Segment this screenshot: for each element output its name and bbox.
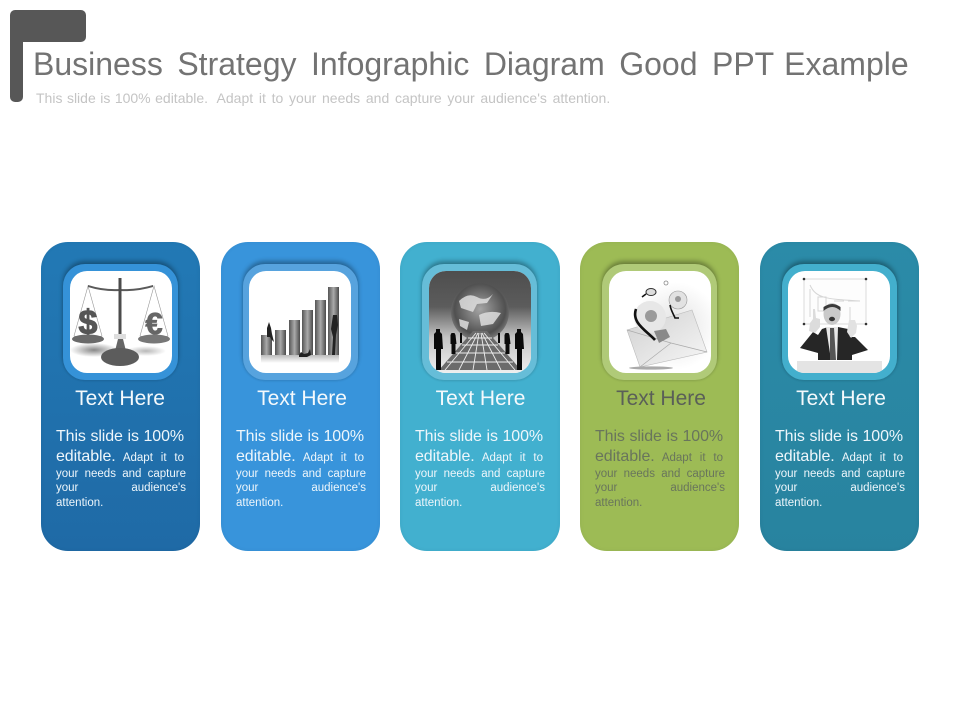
panel: card 1: your needs and capture bbox=[56, 468, 186, 480]
image frame: scales bbox=[63, 264, 178, 380]
icon: balance scales with dollar and euro: $ bbox=[79, 304, 98, 342]
heading: Text Here bbox=[796, 387, 886, 410]
panel: card 5 bbox=[760, 242, 919, 551]
icon: earth with silhouettes on grid path bbox=[429, 271, 531, 373]
panel: card 5: This slide is 100% bbox=[775, 428, 903, 445]
title accent bracket bbox=[10, 10, 86, 102]
panel: card 2: attention. bbox=[236, 497, 283, 509]
panel: card 5: editable. Adapt it to bbox=[775, 448, 903, 465]
panel: card 2: This slide is 100% bbox=[236, 428, 364, 445]
heading: Text Here bbox=[257, 387, 347, 410]
panel: card 1: editable. Adapt it to bbox=[56, 448, 184, 465]
panel: card 2: your audience's bbox=[236, 482, 366, 494]
panel: card 2 bbox=[221, 242, 380, 551]
panel: card 4: editable. Adapt it to bbox=[595, 448, 723, 465]
body text bbox=[595, 428, 725, 509]
icon: balance scales with dollar and euro bbox=[70, 271, 172, 373]
panel: card 5: your audience's bbox=[775, 482, 905, 494]
panel: card 3 bbox=[400, 242, 560, 551]
heading: Text Here bbox=[616, 387, 706, 410]
body text bbox=[236, 428, 366, 509]
panel: card 1 bbox=[41, 242, 200, 551]
subtitle: This slide is 100% editable. Adapt it to your needs and capture your audience's attention. bbox=[36, 90, 610, 106]
panel: card 3: This slide is 100% bbox=[415, 428, 543, 445]
panel: card 4: This slide is 100% bbox=[595, 428, 723, 445]
icon: businessman at whiteboard bbox=[788, 271, 890, 373]
image frame: presenter bbox=[782, 264, 897, 380]
panel: card 2: editable. Adapt it to bbox=[236, 448, 364, 465]
panel: card 3: editable. Adapt it to bbox=[415, 448, 543, 465]
panel: card 1: attention. bbox=[56, 497, 103, 509]
heading: Text Here bbox=[436, 387, 525, 410]
icon: light bulbs from envelope bbox=[609, 271, 711, 373]
image frame: earth bbox=[422, 264, 537, 380]
panel: card 3: your needs and capture bbox=[415, 468, 545, 480]
title: Business Strategy Infographic Diagram Good PPT Example bbox=[33, 46, 909, 82]
panel: card 4: attention. bbox=[595, 497, 642, 509]
panel: card 4 bbox=[580, 242, 739, 551]
panel: card 1: your audience's bbox=[56, 482, 186, 494]
panel: card 1: This slide is 100% bbox=[56, 428, 184, 445]
icon: balance scales with dollar and euro: € bbox=[145, 306, 163, 341]
body text bbox=[415, 428, 545, 509]
heading: Text Here bbox=[75, 387, 165, 410]
body text bbox=[56, 428, 186, 509]
panel: card 5: your needs and capture bbox=[775, 468, 905, 480]
panel: card 4: your needs and capture bbox=[595, 468, 725, 480]
panel: card 3: attention. bbox=[415, 497, 462, 509]
image frame: bulbs bbox=[602, 264, 717, 380]
panel: card 3: your audience's bbox=[415, 482, 545, 494]
panel: card 5: attention. bbox=[775, 497, 822, 509]
panel: card 4: your audience's bbox=[595, 482, 725, 494]
image frame: bars bbox=[243, 264, 358, 380]
panel: card 2: your needs and capture bbox=[236, 468, 366, 480]
icon: rising bar chart with figures bbox=[249, 271, 351, 373]
body text bbox=[775, 428, 905, 509]
